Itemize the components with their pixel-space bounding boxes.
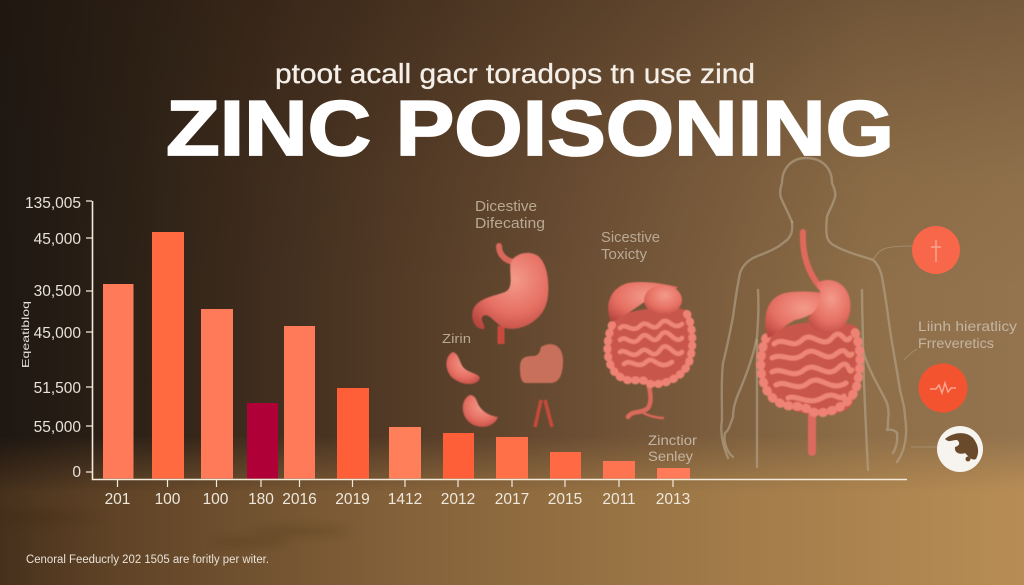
axes [86,201,907,487]
x axis labels: 2016 [282,491,317,508]
icon: small organ lower left [463,395,498,427]
icon: top circle [912,226,960,274]
y axis labels: 51,500 [34,380,81,397]
label: linh hieratlicy: Liinh hieratlicy [918,318,1017,334]
x axis labels: 2017 [495,491,529,508]
bar chart [20,195,907,508]
label: zinn: Zirin [442,331,471,346]
bars [103,232,690,478]
x axis labels: 201 [105,491,130,508]
y axis labels: 45,000 [34,325,81,342]
footnote: Cenoral Feeducrly 202 1505 are foritly per witer. [26,554,269,566]
icon: human body outline [721,158,906,470]
label: linh hieratlicy [918,318,1017,351]
subtitle: ptoot acall gacr toradops tn use zind [275,58,755,89]
label: zinctior senley [648,433,698,464]
connector lines [873,246,937,447]
icon: small stomach section [520,344,563,427]
y axis labels: 45,000 [34,231,81,248]
label: sicestive toxicty: Sicestive [601,230,660,246]
label: linh hieratlicy: Frreveretics [918,335,994,351]
label: sicestive toxicty [601,230,660,263]
y axis labels: 0 [72,464,81,481]
title: ZINC POISONING [166,84,894,172]
x axis labels: 100 [203,491,229,508]
y axis labels: 135,005 [25,195,81,212]
x axis labels [105,491,690,508]
icon: digestive tract in body [759,232,860,452]
icon: middle circle [918,364,968,412]
icon: small organ upper left [446,352,480,384]
icon: liver and intestines [606,282,693,418]
y axis labels: 30,500 [34,283,81,300]
label: digestive difecating [475,199,545,232]
x axis labels: 2012 [441,491,475,508]
label: digestive difecating: Difecating [475,216,545,232]
x axis labels: 2015 [548,491,582,508]
y axis labels: 55,000 [34,419,81,436]
x axis labels: 2019 [335,491,370,508]
icon: bottom white circle [937,426,983,472]
x axis labels: 100 [155,491,181,508]
x axis labels: 2011 [602,491,636,508]
x axis labels: 1412 [388,491,422,508]
x axis labels: 2013 [656,491,690,508]
label: zinctior senley: Senley [648,449,693,464]
y axis title: Eqeatibloq [20,301,32,368]
y axis labels [25,195,81,481]
label: digestive difecating: Dicestive [475,199,537,215]
label: zinctior senley: Zinctior [648,433,698,448]
x axis labels: 180 [248,491,274,508]
icon: large stomach [472,246,548,344]
label: sicestive toxicty: Toxicty [601,247,648,263]
